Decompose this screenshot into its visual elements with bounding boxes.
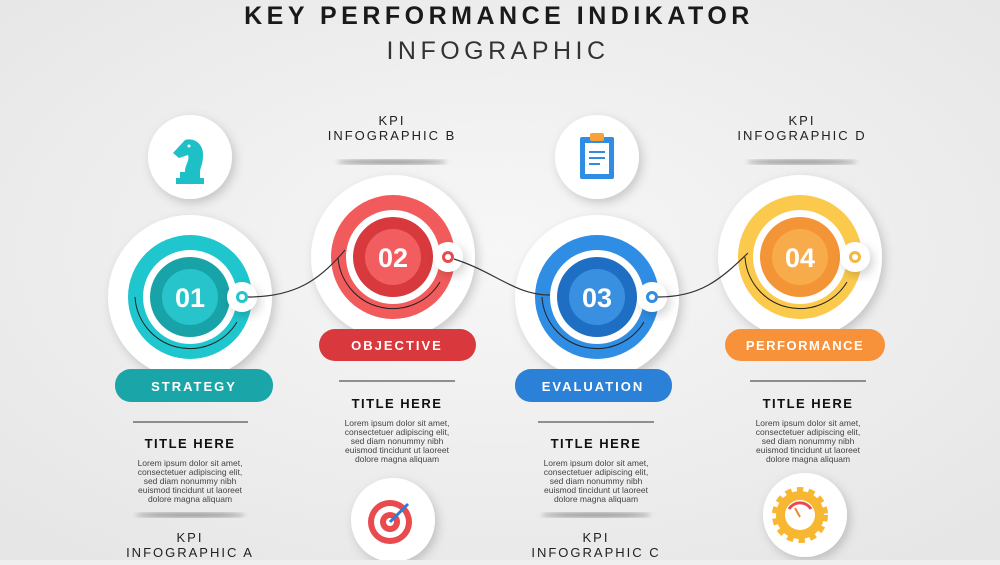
text block A — [138, 436, 243, 504]
text block B: Lorem ipsum dolor sit amet, — [345, 418, 449, 428]
text block D — [756, 396, 861, 464]
icon: gear gauge — [763, 473, 847, 557]
title — [244, 2, 754, 65]
pill: strategy: STRATEGY — [151, 379, 237, 394]
ring 01: 01 — [175, 283, 205, 313]
step A: strategy — [108, 115, 273, 560]
step C: evaluation — [515, 115, 679, 560]
text block C: dolore magna aliquam — [554, 494, 638, 504]
icon: target — [351, 478, 435, 562]
pill: performance: PERFORMANCE — [746, 338, 864, 353]
text block D: Lorem ipsum dolor sit amet, — [756, 418, 860, 428]
label KPI C: INFOGRAPHIC C — [531, 545, 661, 560]
text block A: consectetuer adipiscing elit, — [138, 467, 242, 477]
text block A: euismod tincidunt ut laoreet — [138, 485, 243, 495]
ring 04: 04 — [785, 243, 815, 273]
pill: objective — [319, 329, 476, 361]
text block B: sed diam nonummy nibh — [351, 436, 444, 446]
text block D: sed diam nonummy nibh — [762, 436, 855, 446]
text block B — [345, 396, 450, 464]
text block A: dolore magna aliquam — [148, 494, 232, 504]
text block D: dolore magna aliquam — [766, 454, 850, 464]
text block C: euismod tincidunt ut laoreet — [544, 485, 649, 495]
ring 02 — [311, 175, 475, 339]
label KPI B: KPI — [379, 113, 405, 128]
text block B: consectetuer adipiscing elit, — [345, 427, 449, 437]
step D: performance — [718, 113, 885, 557]
step B: objective — [311, 113, 476, 562]
pill: performance — [725, 329, 885, 361]
text block C: consectetuer adipiscing elit, — [544, 467, 648, 477]
ring 02: 02 — [378, 243, 408, 273]
pill: objective: OBJECTIVE — [351, 338, 443, 353]
text block D: consectetuer adipiscing elit, — [756, 427, 860, 437]
label KPI C — [531, 530, 661, 560]
label KPI A: KPI — [177, 530, 203, 545]
label KPI D: KPI — [789, 113, 815, 128]
label KPI A — [126, 530, 254, 560]
icon: chess knight — [148, 115, 232, 199]
text block C — [544, 436, 649, 504]
icon: clipboard — [555, 115, 639, 199]
text block D: TITLE HERE — [763, 396, 853, 411]
text block C: TITLE HERE — [551, 436, 641, 451]
title: KEY PERFORMANCE INDIKATOR — [244, 2, 754, 30]
ring 03 — [515, 215, 679, 379]
ring 04 — [718, 175, 882, 339]
text block A: sed diam nonummy nibh — [144, 476, 237, 486]
connector lines — [248, 250, 748, 297]
text block C: Lorem ipsum dolor sit amet, — [544, 458, 648, 468]
label KPI D — [737, 113, 867, 143]
text block D: euismod tincidunt ut laoreet — [756, 445, 861, 455]
text block C: sed diam nonummy nibh — [550, 476, 643, 486]
label KPI D: INFOGRAPHIC D — [737, 128, 867, 143]
label KPI B: INFOGRAPHIC B — [328, 128, 456, 143]
label KPI A: INFOGRAPHIC A — [126, 545, 254, 560]
text block B: euismod tincidunt ut laoreet — [345, 445, 450, 455]
title: INFOGRAPHIC — [386, 37, 610, 65]
text block B: dolore magna aliquam — [355, 454, 439, 464]
text block A: Lorem ipsum dolor sit amet, — [138, 458, 242, 468]
label KPI B — [328, 113, 456, 143]
ring 03: 03 — [582, 283, 612, 313]
pill: strategy — [115, 369, 273, 402]
text block B: TITLE HERE — [352, 396, 442, 411]
label KPI C: KPI — [583, 530, 609, 545]
text block A: TITLE HERE — [145, 436, 235, 451]
pill: evaluation — [515, 369, 672, 402]
pill: evaluation: EVALUATION — [542, 379, 644, 394]
ring 01 — [108, 215, 272, 379]
